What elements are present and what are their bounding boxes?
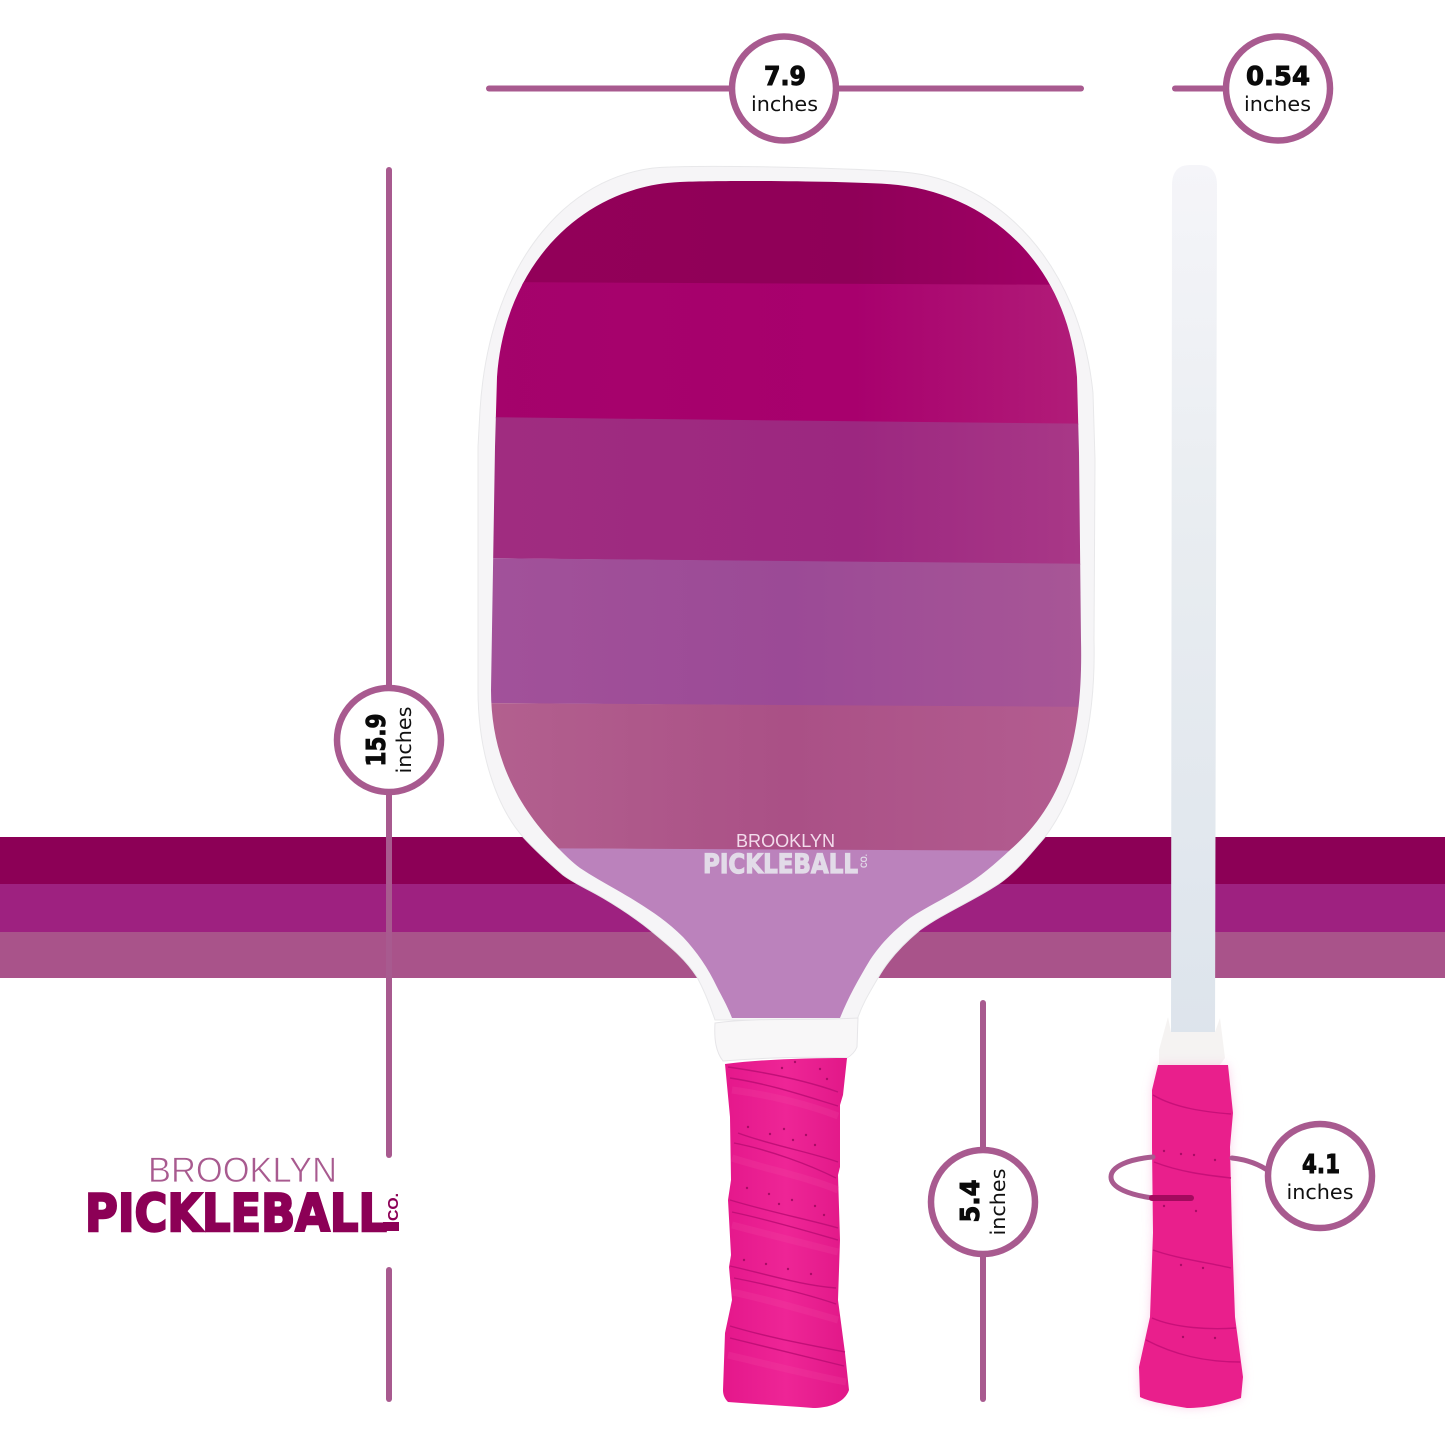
dimension: paddle height badge: 15.9 <box>362 714 392 766</box>
dimension: paddle width: inches <box>751 92 818 116</box>
dimension: paddle height line <box>386 170 392 1399</box>
dimension: paddle width: 7.9 <box>764 62 806 92</box>
dimension: paddle height badge <box>337 688 441 792</box>
side view grip <box>1139 1065 1243 1408</box>
paddle logo: CO. <box>859 854 869 868</box>
dimension: paddle thickness <box>1175 36 1330 140</box>
dimension: paddle width <box>489 36 1081 140</box>
paddle logo: PICKLEBALL <box>703 849 858 880</box>
paddle logo <box>703 831 869 880</box>
brand logo: CO. <box>385 1193 402 1221</box>
dimension: grip circumference badge: inches <box>1286 1180 1354 1204</box>
paddle <box>470 166 1110 1408</box>
circumference ring <box>1111 1157 1270 1198</box>
collar <box>715 1018 858 1061</box>
brand logo: PICKLEBALL <box>85 1184 387 1244</box>
dimension: handle length <box>931 1003 1035 1399</box>
side view collar <box>1159 1017 1225 1066</box>
side view of paddle: shaft <box>1171 165 1217 1040</box>
dimension: paddle height badge: inches <box>392 706 416 774</box>
dimension: paddle thickness: 0.54 <box>1246 62 1310 92</box>
brand logo <box>85 1151 402 1244</box>
dimension: grip circumference badge: 4.1 <box>1302 1150 1340 1180</box>
paddle logo: BROOKLYN <box>736 831 835 851</box>
background stripes <box>0 837 1445 978</box>
dimension: paddle thickness: inches <box>1244 92 1311 116</box>
dimension: grip circumference badge <box>1268 1124 1372 1228</box>
brand logo: BROOKLYN <box>148 1151 337 1190</box>
dimension: handle length: inches <box>986 1168 1010 1236</box>
dimension: handle length: 5.4 <box>956 1180 986 1222</box>
handle grip <box>723 1058 849 1408</box>
paddle colour bands <box>491 181 1082 1018</box>
paddle edge guard <box>478 166 1095 1020</box>
